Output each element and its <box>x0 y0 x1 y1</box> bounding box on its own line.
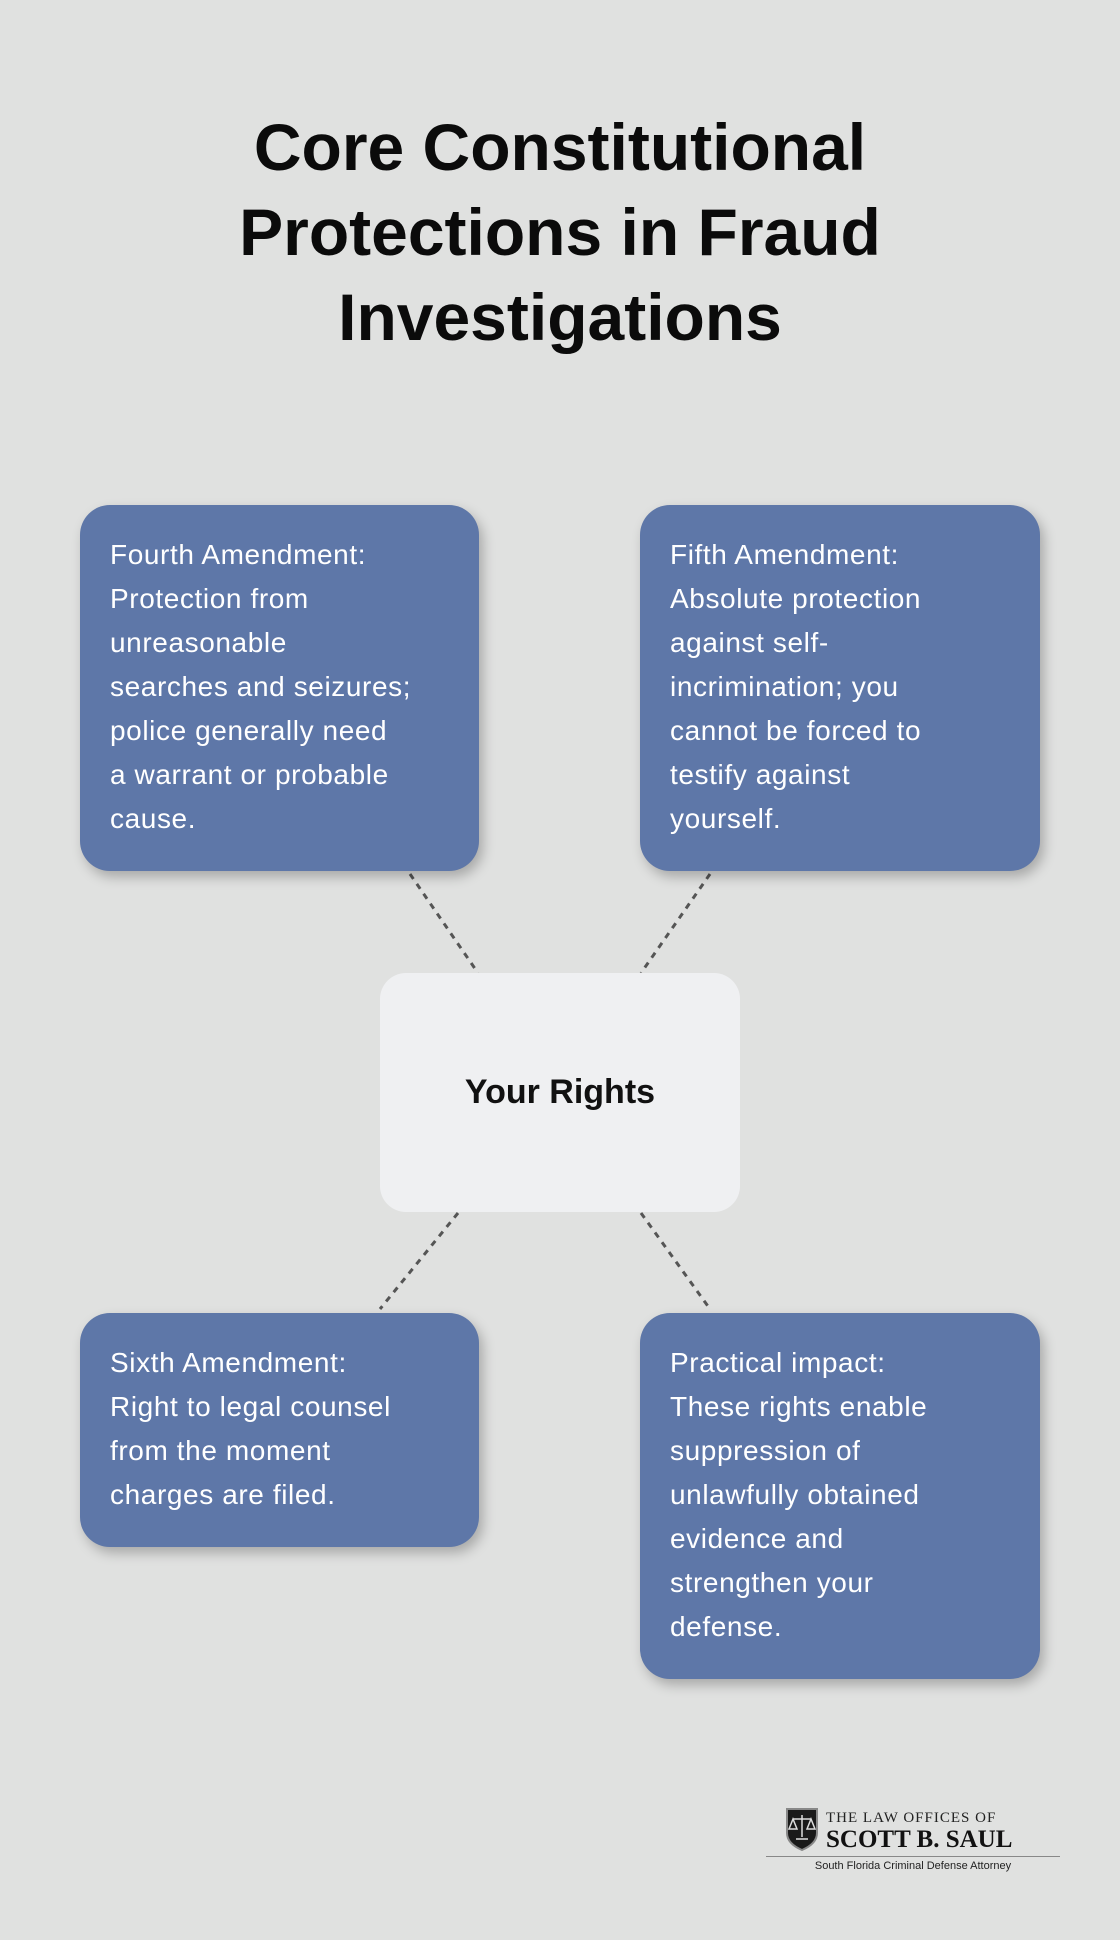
title <box>239 110 881 354</box>
panel: sixth amendment: charges are filed. <box>110 1479 336 1510</box>
panel: fourth amendment: searches and seizures; <box>110 671 411 702</box>
panel: fourth amendment <box>80 505 479 871</box>
panel: sixth amendment: from the moment <box>110 1435 331 1466</box>
panel: sixth amendment: Sixth Amendment: <box>110 1347 347 1378</box>
panel: fourth amendment: a warrant or probable <box>110 759 389 790</box>
panel: fifth amendment <box>640 505 1040 871</box>
panel: fourth amendment: cause. <box>110 803 196 834</box>
panel: sixth amendment: Right to legal counsel <box>110 1391 391 1422</box>
logo: SCOTT B. SAUL <box>826 1826 1012 1853</box>
icon: shield <box>786 1808 818 1851</box>
panel: practical impact: evidence and <box>670 1523 844 1554</box>
panel: fourth amendment: Protection from <box>110 583 309 614</box>
title: Investigations <box>338 280 782 354</box>
panel: fourth amendment: Fourth Amendment: <box>110 539 366 570</box>
panel: practical impact: suppression of <box>670 1435 861 1466</box>
panel: practical impact: unlawfully obtained <box>670 1479 920 1510</box>
panel: fifth amendment: Absolute protection <box>670 583 921 614</box>
logo: THE LAW OFFICES OF <box>826 1810 996 1826</box>
logo: South Florida Criminal Defense Attorney <box>815 1860 1011 1872</box>
logo <box>766 1808 1060 1872</box>
panel: fourth amendment: police generally need <box>110 715 387 746</box>
panel: practical impact <box>640 1313 1040 1679</box>
panel: fifth amendment: Fifth Amendment: <box>670 539 899 570</box>
panel: practical impact: strengthen your <box>670 1567 874 1598</box>
center: your rights <box>380 973 740 1212</box>
panel: practical impact: These rights enable <box>670 1391 927 1422</box>
panel: fifth amendment: cannot be forced to <box>670 715 921 746</box>
title: Protections in Fraud <box>239 195 881 269</box>
panel: sixth amendment <box>80 1313 479 1547</box>
panel: fifth amendment: against self- <box>670 627 829 658</box>
title: Core Constitutional <box>254 110 866 184</box>
panel: practical impact: Practical impact: <box>670 1347 886 1378</box>
panel: fifth amendment: testify against <box>670 759 850 790</box>
panel: practical impact: defense. <box>670 1611 782 1642</box>
center: your rights: Your Rights <box>465 1073 655 1111</box>
panel: fifth amendment: incrimination; you <box>670 671 899 702</box>
panel: fourth amendment: unreasonable <box>110 627 287 658</box>
panel: fifth amendment: yourself. <box>670 803 781 834</box>
